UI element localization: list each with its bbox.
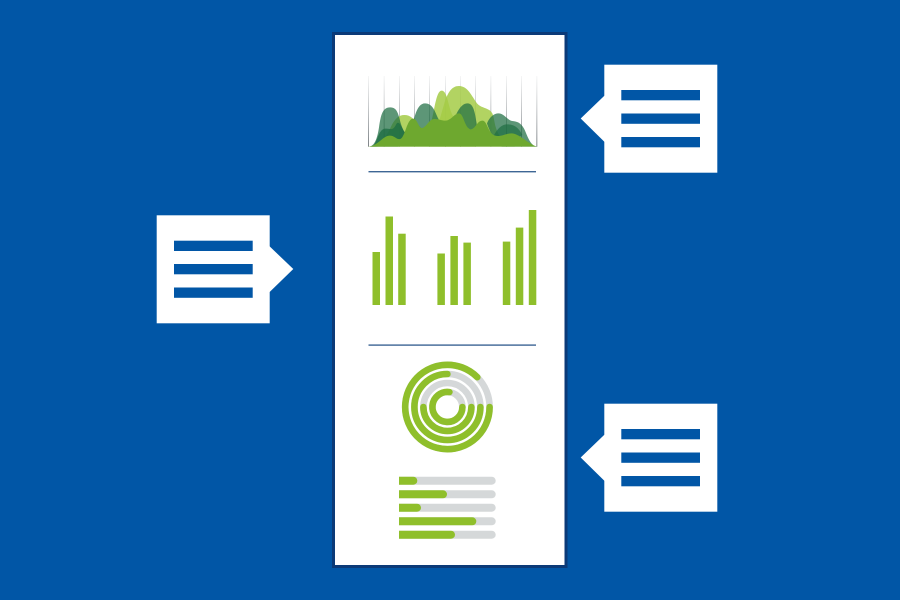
bar group 2 <box>437 236 471 305</box>
bar group 3 <box>503 210 536 305</box>
callout: top right <box>581 65 717 173</box>
callout: left <box>157 215 293 323</box>
bar chart <box>372 210 536 305</box>
divider: bottom <box>368 344 536 346</box>
horizontal progress bars <box>399 477 496 539</box>
panel: central report page <box>334 34 566 566</box>
callout: bottom right <box>581 404 717 512</box>
bar group 1 <box>372 216 406 305</box>
radial ring chart <box>405 365 490 449</box>
area chart <box>368 76 537 147</box>
divider: top <box>368 171 536 172</box>
